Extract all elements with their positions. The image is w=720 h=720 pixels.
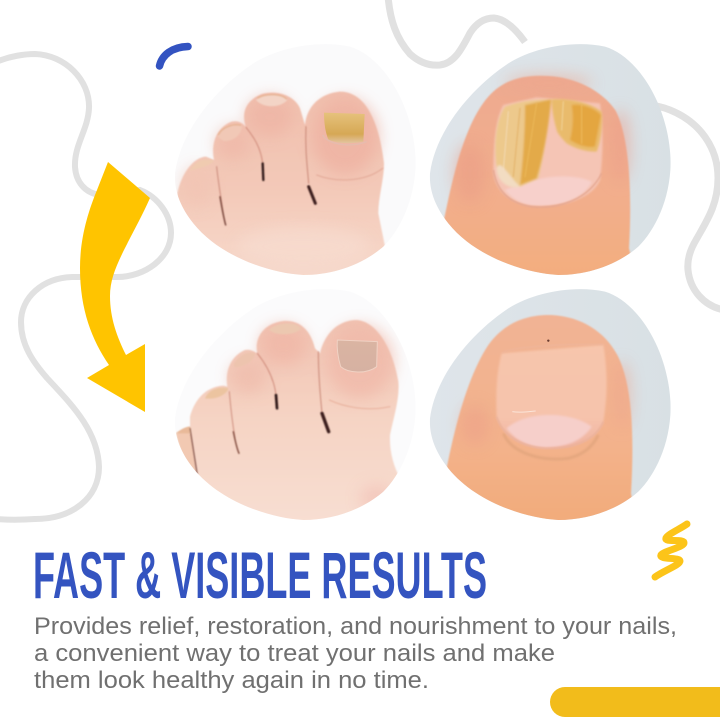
body text: Provides relief, restoration, and nourishment to your nails, (34, 613, 677, 640)
photo: healed toenail close-up (430, 289, 670, 520)
squiggle: top grey line (388, 0, 525, 65)
arrow: yellow curved down arrow (80, 162, 150, 412)
icon: yellow lightning squiggle (655, 524, 687, 577)
nail: healthy big toe nail (337, 340, 377, 372)
squiggle: left grey line (0, 54, 171, 520)
icon: blue arc (160, 46, 188, 66)
body text (34, 613, 677, 694)
photo: damaged toenail close-up (430, 44, 670, 275)
nail: yellow damaged nail patches (495, 99, 602, 187)
nail: yellow infected nail (324, 113, 365, 143)
body text: them look healthy again in no time. (34, 667, 429, 694)
photo: healed toes (176, 316, 403, 520)
squiggle: right grey line (640, 105, 720, 310)
body text: a convenient way to treat your nails and make (34, 640, 555, 667)
decorative yellow pill (550, 687, 720, 717)
photo: infected toes (175, 86, 389, 275)
